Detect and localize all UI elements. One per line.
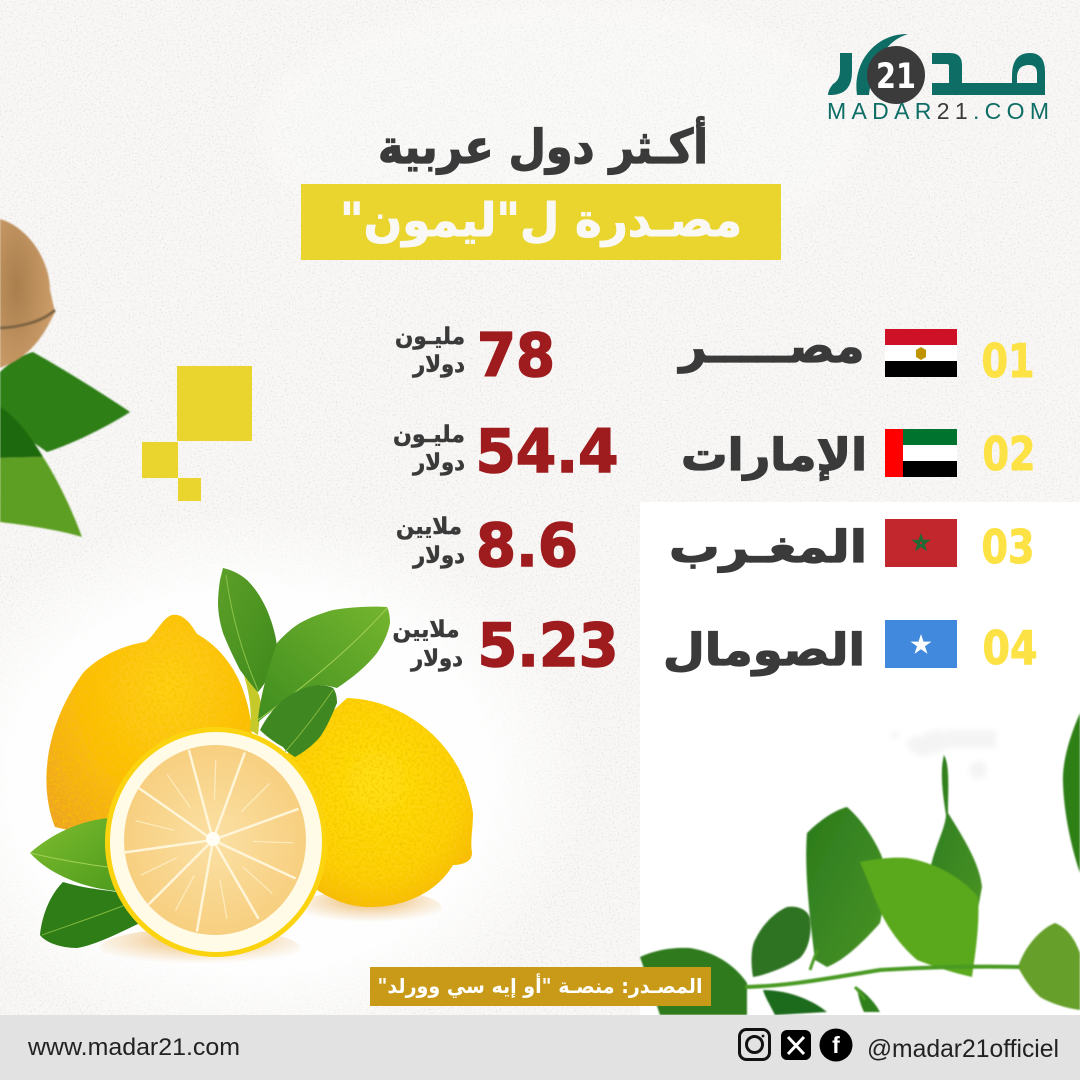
icon: facebook — [820, 1028, 852, 1062]
row 1: Egypt: 78 — [477, 321, 555, 391]
half lemon — [105, 727, 327, 957]
row 2: UAE: 54.4 — [476, 417, 618, 487]
leaf middle — [260, 685, 337, 757]
row 2: UAE — [393, 417, 1036, 487]
row 3: Morocco: 8.6 — [476, 511, 578, 581]
decorative yellow squares — [142, 366, 252, 501]
row 3: Morocco: المغـرب — [669, 522, 867, 573]
title banner: مصـدرة ل"ليمون" — [340, 193, 742, 247]
walnut and leaves top left — [0, 219, 130, 537]
row 2: UAE: الإمارات — [681, 430, 867, 481]
logo letters — [932, 53, 1045, 95]
row 1: Egypt: مليـون — [395, 324, 465, 350]
row 2: UAE: دولار — [412, 450, 465, 476]
title — [301, 116, 781, 260]
country rows — [392, 319, 1038, 681]
footer bar — [0, 1015, 1080, 1080]
social handle: @madar21officiel — [867, 1035, 1059, 1063]
flag: Somalia — [885, 620, 957, 668]
stem — [243, 672, 261, 735]
website: www.madar21.com — [27, 1034, 240, 1061]
branch with leaves bottom right — [640, 713, 1080, 1015]
source note: المصـدر: منصـة "أو إيه سي وورلد" — [378, 972, 702, 999]
flag: Egypt — [885, 329, 957, 377]
leaf top — [218, 568, 277, 692]
logo: madar21 — [827, 34, 1049, 124]
row 4: Somalia: ملايين — [392, 617, 460, 643]
logo badge 21: 21 — [876, 57, 916, 97]
left whole lemon — [46, 615, 252, 860]
logo badge 21 — [867, 46, 925, 104]
title banner — [301, 184, 781, 260]
lemon shadows — [100, 890, 442, 968]
source note — [370, 967, 711, 1006]
row 4: Somalia: 5.23 — [478, 611, 618, 681]
flag: Morocco — [885, 519, 957, 567]
row 3: Morocco: 03 — [982, 520, 1034, 574]
row 2: UAE: 02 — [982, 427, 1036, 481]
row 3: Morocco: دولار — [412, 543, 465, 569]
logo wordmark: MADAR21.COM — [827, 98, 1049, 124]
faint ghost mark on white area — [891, 730, 996, 779]
title line 1: أكـثر دول عربية — [378, 116, 708, 175]
icon: facebook: f — [832, 1032, 840, 1058]
icon: X — [781, 1030, 811, 1060]
logo crescent and ra — [828, 34, 908, 95]
row 1: Egypt — [395, 319, 1034, 391]
row 3: Morocco: ملايين — [396, 514, 462, 540]
row 4: Somalia: دولار — [410, 646, 463, 672]
lemons illustration — [30, 568, 473, 968]
row 1: Egypt: 01 — [982, 334, 1034, 388]
row 1: Egypt: مصـــــر — [677, 319, 864, 373]
icon: instagram — [740, 1030, 770, 1060]
row 1: Egypt: دولار — [412, 352, 465, 378]
right whole lemon — [280, 698, 473, 907]
row 4: Somalia — [392, 611, 1038, 681]
flag: UAE — [885, 429, 957, 477]
row 3: Morocco — [396, 511, 1034, 581]
leaf right — [258, 607, 390, 722]
leaf lower left — [30, 818, 125, 892]
row 4: Somalia: 04 — [982, 621, 1038, 675]
row 2: UAE: مليـون — [393, 422, 465, 448]
leaf bottom left — [40, 882, 140, 948]
row 4: Somalia: الصومال — [663, 625, 865, 676]
